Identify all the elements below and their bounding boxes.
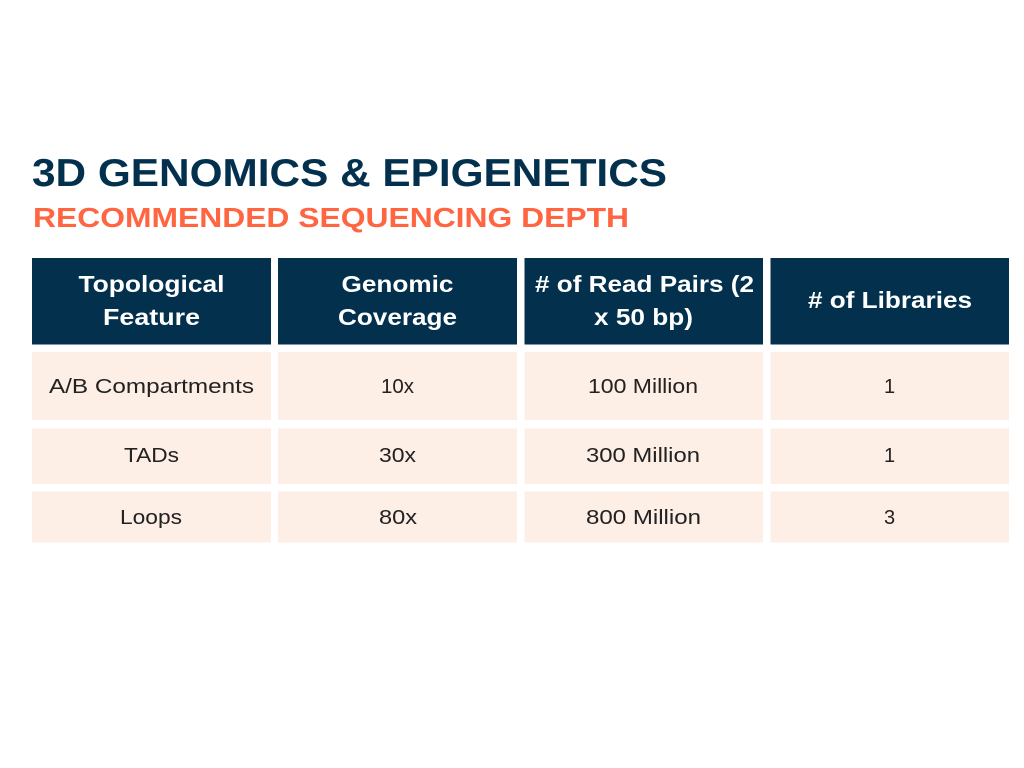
header cell: read pairs: x 50 bp)	[594, 304, 693, 330]
header cell: libraries: # of Libraries	[808, 287, 972, 313]
header cell: genomic coverage	[278, 258, 517, 344]
header cell: genomic coverage: Coverage	[338, 304, 457, 330]
header cell: read pairs: # of Read Pairs (2	[535, 271, 754, 297]
header cell: topological feature: Feature	[103, 304, 200, 330]
header cell: genomic coverage: Genomic	[342, 271, 454, 297]
row: TADs: 300 Million	[586, 445, 700, 467]
title: 3D GENOMICS & EPIGENETICS	[32, 152, 667, 195]
row: loops: Loops	[120, 507, 182, 529]
row: TADs: TADs	[124, 445, 179, 467]
row: loops: 80x	[379, 507, 417, 529]
row: A/B compartments: 1	[884, 376, 895, 398]
header cell: read pairs	[524, 258, 763, 344]
header cell: topological feature	[32, 258, 271, 344]
row: TADs: 30x	[379, 445, 416, 467]
row: TADs: 1	[884, 445, 895, 467]
row: A/B compartments: A/B Compartments	[49, 376, 254, 398]
row: loops: 800 Million	[586, 507, 701, 529]
subtitle: RECOMMENDED SEQUENCING DEPTH	[33, 202, 629, 233]
row: TADs	[32, 428, 1009, 484]
row: A/B compartments	[32, 352, 1009, 420]
header cell: topological feature: Topological	[78, 271, 224, 297]
row: A/B compartments: 10x	[381, 376, 414, 398]
header cell: libraries	[770, 258, 1009, 344]
row: A/B compartments: 100 Million	[588, 376, 698, 398]
row: loops	[32, 492, 1009, 542]
row: loops: 3	[884, 507, 895, 529]
table	[32, 258, 1009, 542]
